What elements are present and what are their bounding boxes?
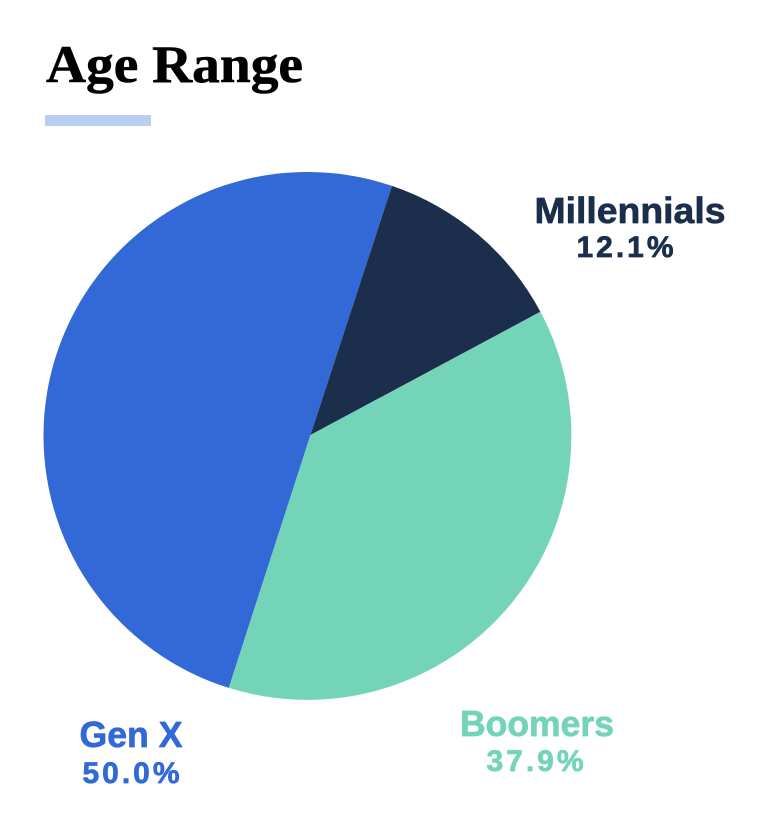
label: Gen X: 50.0% bbox=[82, 757, 180, 790]
label: Boomers: 37.9% bbox=[486, 745, 584, 778]
label: Boomers bbox=[460, 703, 614, 778]
label: Boomers: Boomers bbox=[460, 703, 614, 744]
slice: Boomers 37.9% bbox=[229, 312, 571, 700]
slice: Millennials 12.1% bbox=[310, 186, 540, 435]
pie chart bbox=[44, 172, 571, 700]
label: Millennials bbox=[534, 190, 726, 264]
title: Age Range bbox=[46, 36, 303, 94]
title underline bbox=[45, 115, 151, 126]
label: Gen X bbox=[80, 714, 182, 790]
label: Millennials: Millennials bbox=[534, 190, 726, 231]
label: Millennials: 12.1% bbox=[576, 231, 674, 264]
label: Gen X: Gen X bbox=[80, 714, 182, 755]
slice: Gen X 50.0% bbox=[44, 172, 392, 688]
